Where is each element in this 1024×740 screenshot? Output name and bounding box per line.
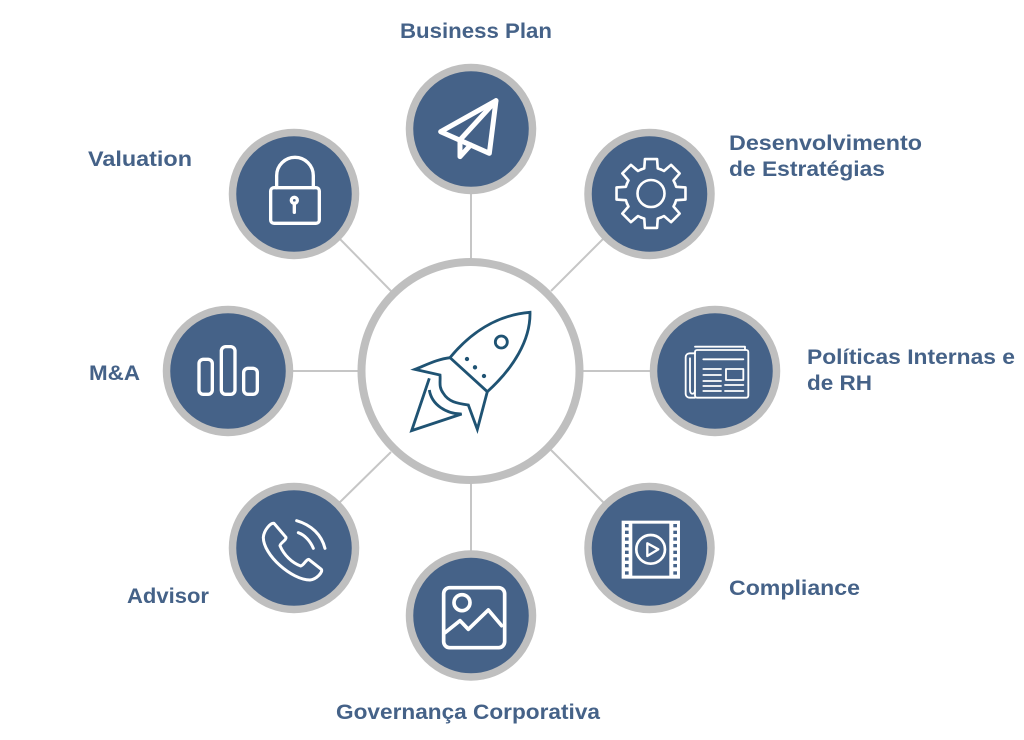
- connector lines: [290, 190, 654, 555]
- label: Desenvolvimento de Estratégias: Desenvolvimento: [729, 132, 922, 155]
- icon: paper plane: [441, 101, 496, 157]
- node: Business Plan: [410, 68, 532, 190]
- label: Políticas Internas e de RH: de RH: [807, 372, 872, 395]
- label: Advisor: Advisor: [127, 585, 209, 608]
- icon: picture: [444, 588, 505, 648]
- label: Valuation: Valuation: [88, 148, 192, 171]
- icon: bar chart: [199, 347, 257, 394]
- icon: rocket: [412, 312, 530, 431]
- icon: padlock: [271, 157, 319, 223]
- node: Governança Corporativa: [410, 554, 532, 677]
- label: Desenvolvimento de Estratégias: de Estratégias: [729, 158, 885, 181]
- node: Desenvolvimento de Estratégias: [588, 132, 711, 256]
- icon: telephone: [263, 521, 325, 580]
- node: Compliance: [588, 486, 711, 610]
- label: Business Plan: Business Plan: [400, 20, 552, 43]
- node: M&A: [166, 310, 290, 432]
- label: Políticas Internas e de RH: Políticas Internas e: [807, 346, 1015, 369]
- icon: film with play button: [622, 521, 680, 579]
- node: Políticas Internas e de RH: [654, 310, 776, 432]
- label: M&A: M&A: [89, 362, 140, 385]
- icon: gear: [617, 159, 685, 228]
- node: Advisor: [232, 486, 356, 610]
- label: Políticas Internas e de RH: [807, 346, 1015, 395]
- label: Compliance: Compliance: [729, 577, 860, 600]
- label: Desenvolvimento de Estratégias: [729, 132, 922, 181]
- icon: newspaper: [686, 347, 748, 398]
- node: Valuation: [232, 132, 356, 256]
- central hub circle: [362, 262, 580, 480]
- label: Governança Corporativa: Governança Corporativa: [336, 701, 600, 724]
